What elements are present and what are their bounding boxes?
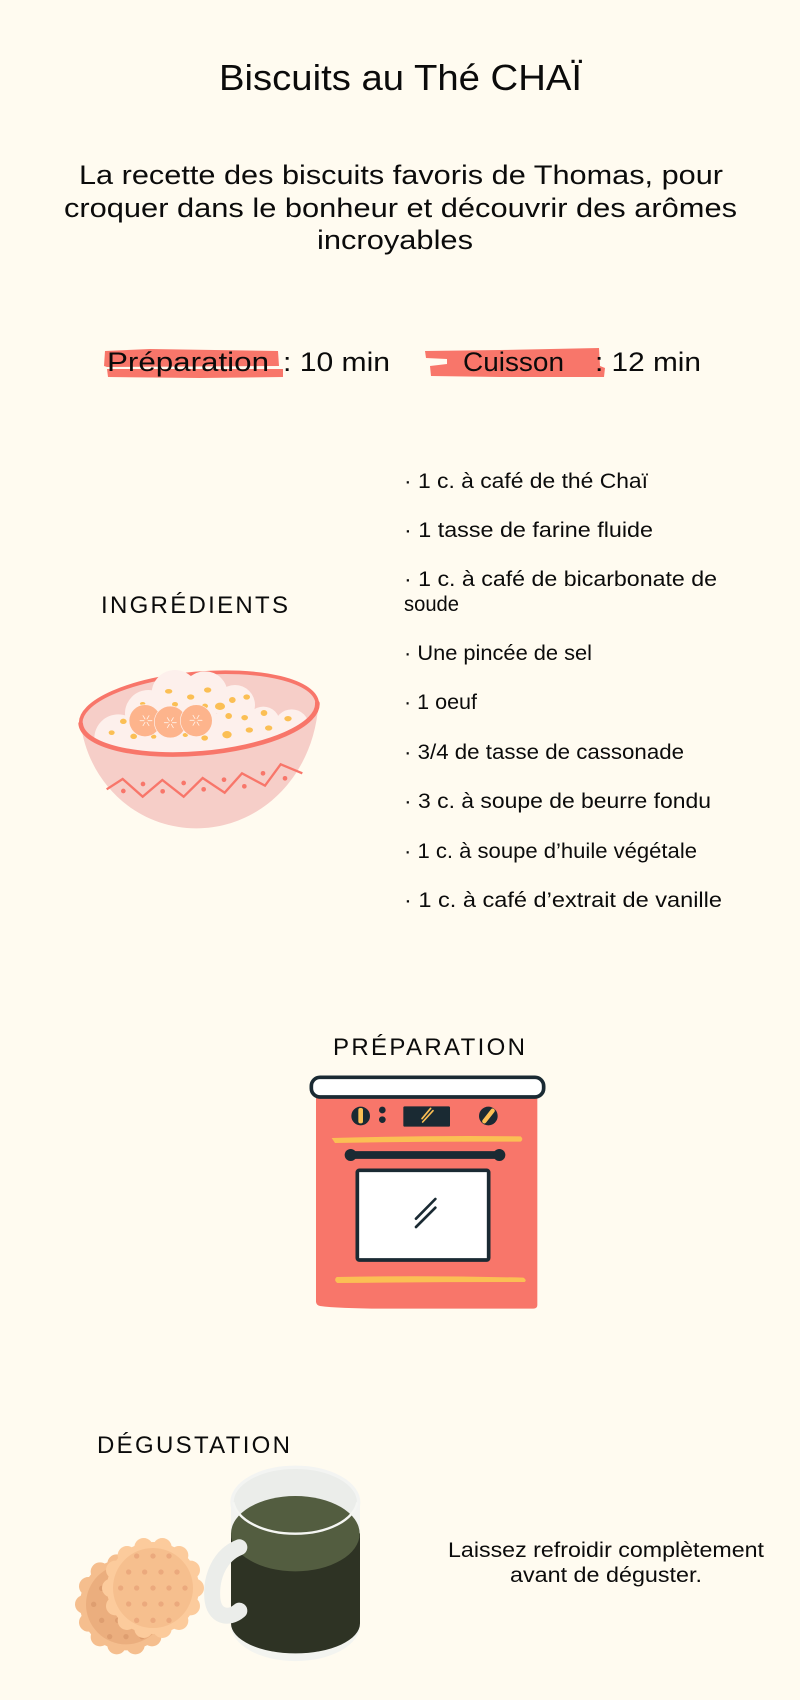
label: cooking time: Cuisson	[463, 347, 564, 377]
label: preparation time: Préparation	[107, 347, 269, 377]
closing text	[448, 1539, 764, 1587]
title: Biscuits au Thé CHAÏ	[219, 57, 582, 98]
highlight: cooking	[425, 348, 605, 377]
subtitle: La recette des biscuits favoris de Thomas, pour	[79, 160, 723, 190]
heading: tasting: DÉGUSTATION	[97, 1432, 290, 1459]
subtitle: incroyables	[317, 225, 473, 255]
mug	[212, 1467, 360, 1661]
value: 10 min: : 10 min	[283, 347, 390, 377]
ingredient list	[404, 470, 722, 912]
preparation time	[104, 347, 390, 378]
ingredient: thé chaï: · 1 c. à café de thé Chaï	[404, 470, 648, 493]
ingredient: bicarbonate	[404, 568, 717, 616]
ingredient: huile: · 1 c. à soupe d’huile végétale	[404, 840, 697, 863]
ingredient: beurre: · 3 c. à soupe de beurre fondu	[404, 790, 711, 813]
closing text: avant de déguster.	[510, 1564, 702, 1587]
ingredient: bicarbonate: · 1 c. à café de bicarbonate de	[404, 568, 717, 591]
front cookie	[102, 1538, 204, 1638]
heading: ingredients: INGRÉDIENTS	[101, 592, 288, 619]
closing text: Laissez refroidir complètement	[448, 1539, 764, 1562]
ingredient: vanille: · 1 c. à café d’extrait de vanille	[404, 889, 722, 912]
icon: cookies and mug of tea	[75, 1467, 360, 1661]
highlight: preparation	[104, 349, 283, 378]
ingredient: oeuf: · 1 oeuf	[404, 691, 477, 714]
ingredient: farine: · 1 tasse de farine fluide	[404, 519, 653, 542]
ingredient: sel: · Une pincée de sel	[404, 642, 592, 665]
subtitle: croquer dans le bonheur et découvrir des arômes	[64, 193, 737, 223]
back cookie	[75, 1554, 177, 1654]
subtitle	[64, 160, 737, 255]
cooking time	[425, 347, 701, 377]
value: 12 min: : 12 min	[595, 347, 701, 377]
icon: oven	[311, 1077, 544, 1309]
icon: bowl of cookie dough	[77, 663, 321, 828]
ingredient: bicarbonate: soude	[404, 593, 459, 616]
heading: preparation: PRÉPARATION	[333, 1034, 525, 1061]
ingredient: cassonade: · 3/4 de tasse de cassonade	[404, 741, 684, 764]
